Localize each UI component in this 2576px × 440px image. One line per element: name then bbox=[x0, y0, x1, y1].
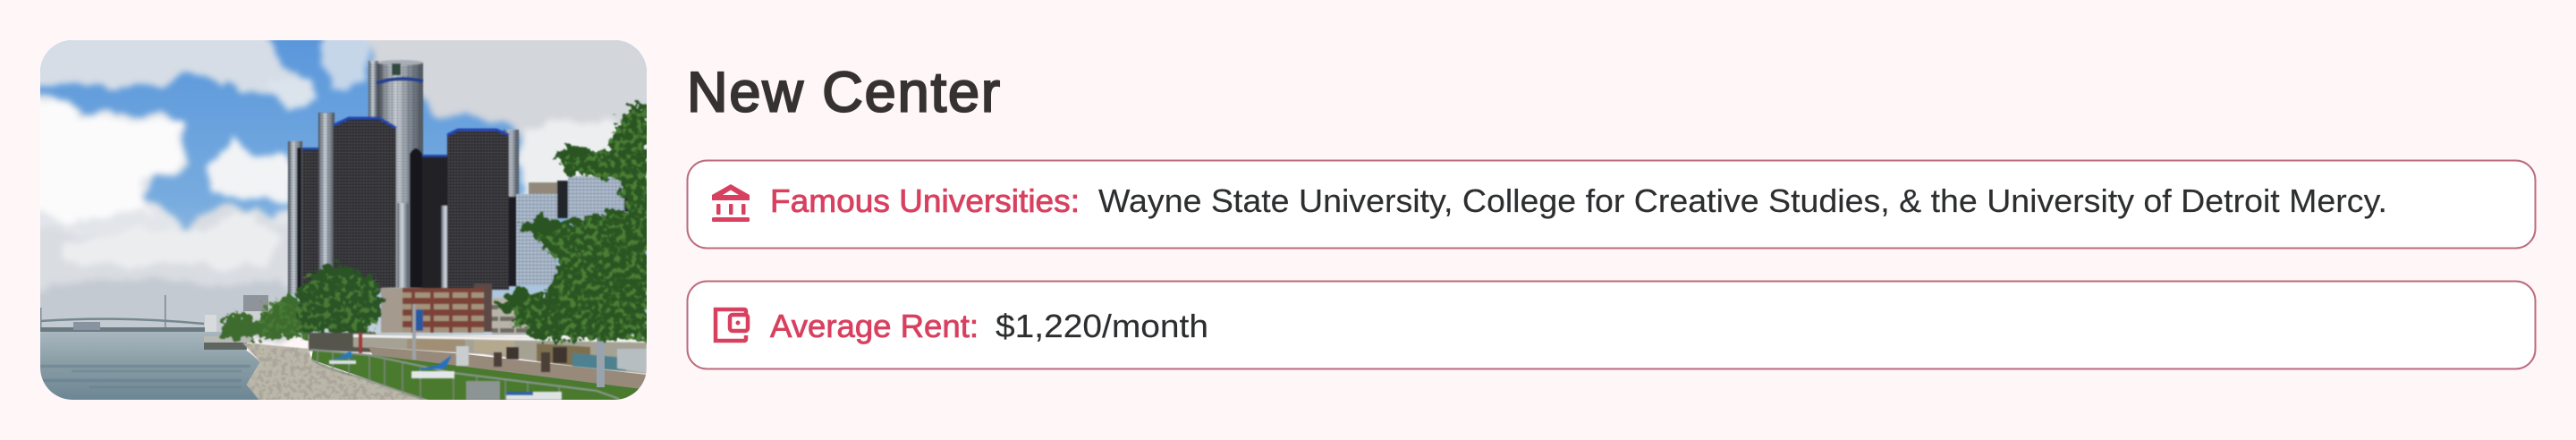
buildings: glass offices on the right bbox=[516, 176, 638, 285]
clouds bbox=[40, 40, 647, 345]
large foreground tree bbox=[497, 104, 649, 387]
card: famous universities bbox=[687, 161, 2535, 249]
river bbox=[40, 332, 268, 400]
icon: wallet bbox=[716, 309, 748, 341]
icon: university building bbox=[712, 184, 750, 222]
label: famous universities: Famous Universities: bbox=[770, 182, 1080, 219]
label: average rent: Average Rent: bbox=[770, 308, 979, 344]
title: New Center bbox=[687, 61, 1000, 123]
text: rent amount: $1,220/month bbox=[996, 308, 1208, 344]
railing and park details bbox=[310, 304, 619, 400]
text: university list: Wayne State University, College for Creative Studies, & the University of Detroit Mercy. bbox=[1098, 182, 2387, 219]
trees along the promenade bbox=[219, 264, 380, 338]
rocky shoreline bbox=[242, 343, 433, 402]
sky bbox=[40, 40, 647, 335]
promenade walkway bbox=[369, 347, 647, 390]
distant bridge and far shore bbox=[40, 295, 268, 332]
brick parking structure bbox=[381, 283, 567, 334]
mural fence bbox=[309, 333, 647, 374]
card: average rent bbox=[687, 281, 2535, 368]
dock and riverboat bbox=[204, 315, 253, 350]
grass lawn bbox=[311, 350, 641, 402]
buildings: Renaissance Center towers bbox=[288, 60, 519, 293]
photo: Detroit Renaissance Center on the riverfront bbox=[40, 40, 647, 400]
